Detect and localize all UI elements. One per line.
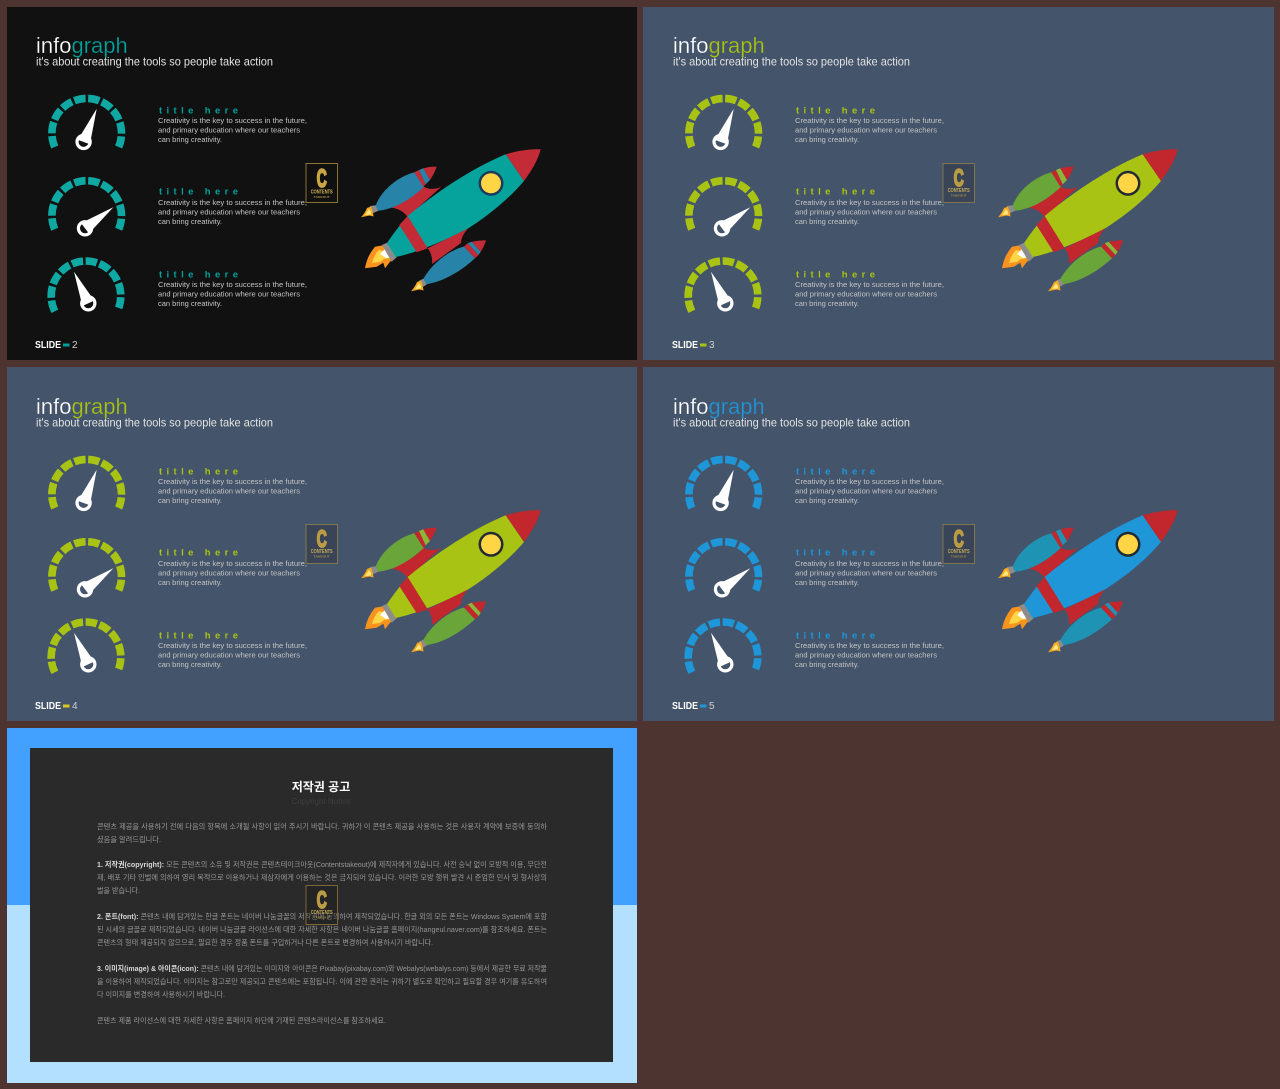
logo: C <box>317 526 327 553</box>
text block 1 <box>158 466 307 505</box>
text block 2 <box>795 548 944 587</box>
logo: TAKEOUT <box>951 554 967 558</box>
section 1: copyright: 1. 저작권(copyright): 모든 콘텐츠의 소유 및 저작권은 콘텐츠테이크아웃(Contentstakeout)에 제작자에게 있습니다. 사전 승낙 없이 모방적 이용, 무단전 <box>97 859 547 869</box>
text block 2: can bring creativity. <box>795 217 859 226</box>
subtitle: it's about creating the tools so people take action <box>673 54 910 68</box>
notice subtitle: Copyright Notice <box>291 797 351 806</box>
icon: gauge 3 <box>49 620 121 672</box>
text block 2: title here <box>796 548 875 558</box>
icon: gauge 3 <box>686 259 758 311</box>
icon: rocket <box>361 149 541 291</box>
logo: TAKEOUT <box>314 916 330 920</box>
text block 1: can bring creativity. <box>795 496 859 505</box>
text block 1: and primary education where our teachers <box>158 125 300 134</box>
logo: CONTENTS <box>311 910 333 916</box>
icon: gauge 2 <box>52 181 122 236</box>
text block 2: can bring creativity. <box>795 578 859 587</box>
icon: gauge 2 <box>689 181 758 236</box>
text block 3: Creativity is the key to success in the future, <box>795 280 944 289</box>
logo: CONTENTS <box>311 190 333 196</box>
heading: infograph <box>36 33 128 58</box>
panel: slide 4 <box>7 367 637 721</box>
logo <box>306 524 338 564</box>
logo <box>306 164 338 202</box>
text block 2: Creativity is the key to success in the future, <box>795 559 944 568</box>
slide number: SLIDE <box>35 340 61 351</box>
slide number: SLIDE <box>35 701 61 712</box>
text block 1 <box>795 466 944 505</box>
text block 1: title here <box>159 466 238 478</box>
icon: gauge 1 <box>689 459 758 511</box>
icon: gauge 3 <box>686 620 758 672</box>
icon: rocket <box>998 149 1178 291</box>
logo: CONTENTS <box>948 188 970 194</box>
text block 3: Creativity is the key to success in the future, <box>158 280 307 289</box>
text block 1: title here <box>796 466 875 478</box>
section 2: font: 된 시세의 글꼴로 제작되었습니다. 네이버 나눔글꼴 라이선스에 대한 자세한 사항은 네이버 나눔글꼴 홈페이지(hangeul.naver.com)를 참조하세요. 폰트는 <box>97 924 547 934</box>
slide number: 3 <box>709 340 715 351</box>
logo <box>943 524 974 564</box>
text block 2: and primary education where our teachers <box>158 568 300 577</box>
text block 1: Creativity is the key to success in the future, <box>795 116 944 125</box>
notice title: 저작권 공고 <box>292 779 350 794</box>
slide number: 4 <box>72 701 78 712</box>
section 3: image and icon: 을 이용하여 제작되었습니다. 이미지는 참고로만 제공되고 콘텐츠에는 포함됩니다. 이에 관한 권리는 귀하가 별도로 확인하고 필요할 경우 여기를 유도하여 <box>97 976 547 986</box>
text block 3: and primary education where our teachers <box>795 650 937 659</box>
logo <box>306 886 338 924</box>
icon: gauge 1 <box>689 98 758 150</box>
subtitle: it's about creating the tools so people take action <box>673 416 910 430</box>
section 2: font: 2. 폰트(font): 콘텐츠 내에 담겨있는 한글 폰트는 네이버 나눔글꼴의 저작권에 동의하여 제작되었습니다. 한글 외의 모든 폰트는 Windows System에 포함 <box>97 911 547 921</box>
text block 2: can bring creativity. <box>158 578 222 587</box>
text block 2: Creativity is the key to success in the future, <box>158 559 307 568</box>
intro text <box>97 821 547 844</box>
slide number <box>672 701 715 712</box>
slide number <box>672 340 715 351</box>
text block 2: can bring creativity. <box>158 217 222 226</box>
text block 2: and primary education where our teachers <box>795 207 937 216</box>
intro text: 콘텐츠 제공을 사용하기 전에 다음의 항목에 소개될 사항이 읽어 주시기 바랍니다. 귀하가 이 콘텐츠 제공을 사용하는 것은 사용자 계약에 보증에 동의하 <box>97 821 547 831</box>
text block 2: title here <box>159 186 238 198</box>
icon: gauge 2 <box>689 542 758 598</box>
icon: rocket <box>361 510 541 652</box>
slide number: 2 <box>72 340 78 351</box>
text block 1: and primary education where our teachers <box>795 125 937 134</box>
text block 3: Creativity is the key to success in the future, <box>158 641 307 650</box>
section 1: copyright: 벌을 받습니다. <box>97 885 140 895</box>
text block 2: Creativity is the key to success in the future, <box>795 198 944 207</box>
text block 1: Creativity is the key to success in the future, <box>158 477 307 486</box>
text block 1: can bring creativity. <box>795 135 859 144</box>
text block 3: title here <box>796 630 875 642</box>
section 3: image and icon: 다 이미지를 변경하여 사용하시기 바랍니다. <box>97 989 225 999</box>
text block 2 <box>795 186 944 226</box>
icon: gauge 3 <box>49 259 121 311</box>
subtitle: it's about creating the tools so people take action <box>36 416 273 430</box>
text block 2 <box>158 186 307 226</box>
text block 2: title here <box>159 548 238 558</box>
text block 3: and primary education where our teachers <box>158 289 300 298</box>
subtitle: it's about creating the tools so people take action <box>36 54 273 68</box>
logo: CONTENTS <box>948 549 970 555</box>
panel: slide 2 <box>7 7 637 360</box>
text block 2: and primary education where our teachers <box>158 207 300 216</box>
text block 3: can bring creativity. <box>158 299 222 308</box>
section 3: image and icon: 3. 이미지(image) & 아이콘(icon): 콘텐츠 내에 담겨있는 이미지와 아이콘은 Pixabay(pixabay.com)와 Webalys(webalys.com) 등에서 제공한 무료 저작물 <box>97 963 547 973</box>
logo: TAKEOUT <box>951 194 967 198</box>
text block 2: and primary education where our teachers <box>795 568 937 577</box>
intro text: 셨음을 알려드립니다. <box>97 834 161 844</box>
text block 3 <box>795 630 944 669</box>
text block 1: and primary education where our teachers <box>158 486 300 495</box>
text block 3: title here <box>796 270 875 280</box>
logo <box>943 164 974 202</box>
logo: C <box>954 526 964 553</box>
slide number <box>35 701 78 712</box>
logo: TAKEOUT <box>314 554 330 558</box>
heading: infograph <box>36 394 128 419</box>
text block 2: title here <box>796 186 875 198</box>
text block 3: and primary education where our teachers <box>795 289 937 298</box>
panel: copyright notice <box>7 728 637 1083</box>
text block 1: can bring creativity. <box>158 496 222 505</box>
text block 3: title here <box>159 270 238 280</box>
closing text: 콘텐츠 제품 라이선스에 대한 자세한 사항은 홈페이지 하단에 기재된 콘텐츠라이선스를 참조하세요. <box>97 1015 386 1025</box>
panel: slide 5 <box>643 367 1274 721</box>
text block 3 <box>795 270 944 308</box>
logo: CONTENTS <box>311 549 333 555</box>
text block 1: title here <box>796 106 875 116</box>
text block 3 <box>158 270 307 308</box>
logo: C <box>317 887 327 914</box>
text block 1: Creativity is the key to success in the future, <box>795 477 944 486</box>
section 1: copyright: 재, 배포 기타 인벌에 의하여 영리 목적으로 이용하거나 제삼자에게 이용하는 것은 금지되어 있습니다. 이러한 모방 행위 발견 시 준엄한 민사 및 형사상의 <box>97 872 547 882</box>
slide number: SLIDE <box>672 340 698 351</box>
icon: gauge 1 <box>52 98 122 150</box>
text block 2 <box>158 548 307 587</box>
slide number <box>35 340 78 351</box>
section 1: copyright <box>97 859 547 895</box>
text block 1 <box>158 106 307 144</box>
text block 1: and primary education where our teachers <box>795 486 937 495</box>
heading: infograph <box>673 394 765 419</box>
logo: TAKEOUT <box>314 195 330 199</box>
text block 1: Creativity is the key to success in the future, <box>158 116 307 125</box>
logo: C <box>317 165 327 193</box>
text block 3: can bring creativity. <box>795 299 859 308</box>
panel: slide 3 <box>643 7 1274 360</box>
slide number: 5 <box>709 701 715 712</box>
text block 1: can bring creativity. <box>158 135 222 144</box>
icon: gauge 1 <box>52 459 122 511</box>
text block 3: and primary education where our teachers <box>158 650 300 659</box>
text block 3: title here <box>159 630 238 642</box>
section 2: font <box>97 911 547 947</box>
slide number: SLIDE <box>672 701 698 712</box>
text block 3 <box>158 630 307 669</box>
text block 3: can bring creativity. <box>158 660 222 669</box>
section 3: image and icon <box>97 963 547 999</box>
icon: gauge 2 <box>52 542 122 598</box>
text block 1: title here <box>159 106 238 116</box>
logo: C <box>954 165 964 192</box>
text block 3: can bring creativity. <box>795 660 859 669</box>
heading: infograph <box>673 33 765 58</box>
icon: rocket <box>998 510 1178 652</box>
text block 1 <box>795 106 944 144</box>
section 2: font: 콘텐츠의 형태 제공되지 않으므로, 필요한 경우 정품 폰트를 구입하거나 다른 폰트로 변경하여 사용하시기 바랍니다. <box>97 937 433 947</box>
text block 2: Creativity is the key to success in the future, <box>158 198 307 207</box>
text block 3: Creativity is the key to success in the future, <box>795 641 944 650</box>
